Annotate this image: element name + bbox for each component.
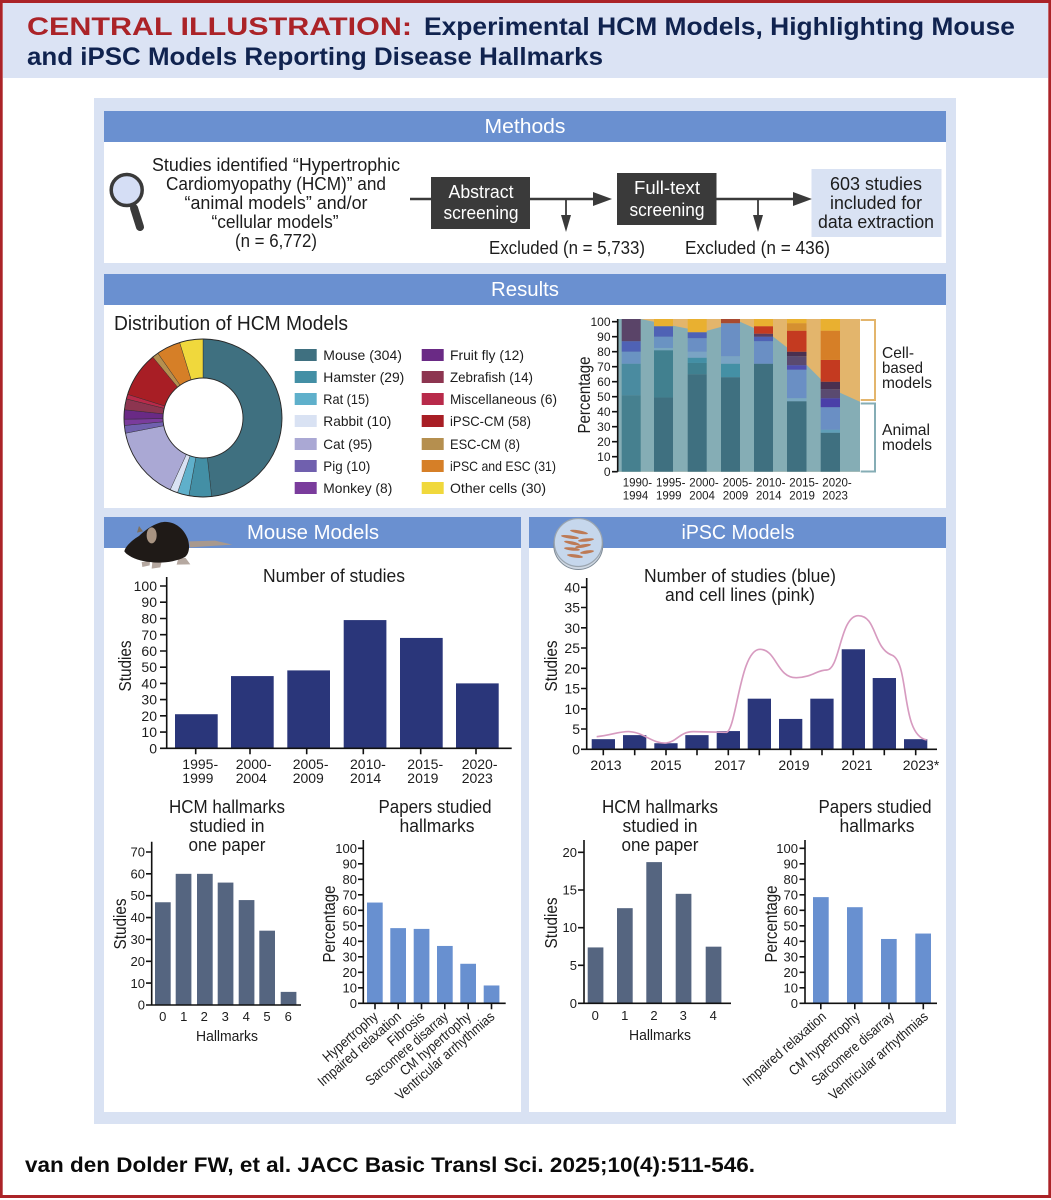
chart: iPSC hallmarks per paper: 20	[563, 845, 577, 860]
box: included studies	[812, 169, 942, 237]
bracket: animal models: Animal	[882, 422, 930, 439]
stacked area chart: percentage by period: 90	[597, 330, 611, 344]
results heading: Results	[491, 278, 559, 301]
chart: mouse hallmarks per paper: Studies	[110, 898, 130, 950]
chart: mouse papers studied hallmarks: Impaired relaxation	[314, 1008, 404, 1089]
chart: mouse hallmarks per paper: 50	[131, 888, 145, 903]
bracket: animal models	[861, 404, 932, 472]
arrow: excluded after full text	[753, 199, 763, 232]
chart: number of mouse studies: 2009	[293, 770, 324, 786]
chart: mouse papers studied hallmarks: 0	[350, 996, 357, 1011]
search description text: (n = 6,772)	[235, 231, 317, 251]
chart: mouse papers studied hallmarks: Papers studied	[378, 797, 492, 817]
donut legend: Other cells (30)	[450, 480, 546, 496]
chart: mouse hallmarks per paper: 4	[243, 1009, 250, 1024]
chart: number of mouse studies: 50	[141, 659, 157, 675]
title banner: and iPSC Models Reporting Disease Hallmarks	[27, 43, 603, 71]
chart: number of mouse studies: Number of studies	[263, 566, 405, 586]
arrow: main flow	[410, 192, 812, 206]
chart: number of mouse studies: 10	[141, 724, 157, 740]
mouse heading: Mouse Models	[247, 521, 379, 544]
chart: iPSC papers studied hallmarks: 0	[791, 996, 798, 1011]
chart: iPSC hallmarks per paper: 0	[592, 1008, 599, 1023]
chart: iPSC hallmarks per paper: studied in	[622, 816, 698, 836]
chart: iPSC studies and cell lines: Number of studies (blue)	[644, 566, 836, 586]
chart: iPSC hallmarks per paper: 0	[570, 996, 577, 1011]
outer light-blue panel background	[94, 98, 956, 1124]
chart: mouse hallmarks per paper: 3	[222, 1009, 229, 1024]
bracket: cell-based models	[861, 320, 932, 400]
donut legend: Rat (15)	[323, 391, 369, 407]
chart: number of mouse studies: 2005-	[293, 756, 329, 772]
chart: iPSC studies and cell lines: 2021	[841, 757, 873, 773]
chart: iPSC papers studied hallmarks: Percentage	[761, 886, 781, 962]
excluded count 5,733: Excluded (n = 5,733)	[489, 238, 645, 258]
arrow: excluded after abstract	[561, 199, 571, 232]
stacked area chart: percentage by period: 70	[597, 360, 611, 374]
chart: iPSC papers studied hallmarks: 20	[784, 965, 798, 980]
stacked area chart: percentage by period: 80	[597, 345, 611, 359]
donut legend: Zebrafish (14)	[450, 369, 533, 385]
chart: mouse hallmarks per paper: 6	[285, 1009, 292, 1024]
donut legend: Rabbit (10)	[323, 413, 391, 429]
chart: iPSC papers studied hallmarks: 80	[784, 872, 798, 887]
chart: mouse papers studied hallmarks: 60	[343, 903, 357, 918]
chart: number of mouse studies: 40	[141, 676, 157, 692]
stacked area chart: percentage by period: 40	[597, 405, 611, 419]
chart: iPSC hallmarks per paper: Studies	[541, 897, 561, 948]
panel: methods	[104, 111, 946, 263]
chart: number of mouse studies: 1999	[182, 770, 214, 786]
chart: iPSC papers studied hallmarks: CM hypertrophy	[785, 1008, 863, 1079]
chart: mouse hallmarks per paper: 70	[131, 844, 145, 860]
chart: iPSC hallmarks per paper	[541, 797, 731, 1044]
bracket: cell-based models: Cell-	[882, 345, 914, 362]
chart: number of mouse studies: Studies	[115, 640, 135, 692]
chart: mouse hallmarks per paper: 1	[180, 1009, 187, 1024]
chart: mouse papers studied hallmarks: 10	[343, 980, 357, 996]
chart: iPSC studies and cell lines: 30	[564, 620, 580, 636]
chart: mouse papers studied hallmarks: 40	[343, 934, 357, 949]
methods heading	[104, 111, 946, 142]
distribution heading: Distribution of HCM Models	[114, 313, 348, 335]
bracket: cell-based models: models	[882, 375, 932, 392]
donut legend: Pig (10)	[323, 458, 370, 474]
stacked area chart: percentage by period: 2009	[723, 490, 748, 502]
stacked area chart: percentage by period: 2020-	[822, 478, 852, 490]
chart: number of mouse studies: 2023	[462, 770, 493, 786]
chart: iPSC hallmarks per paper: 5	[570, 958, 577, 973]
chart: iPSC hallmarks per paper: 1	[621, 1008, 628, 1023]
chart: iPSC studies and cell lines: 2013	[590, 757, 622, 773]
stacked area chart: percentage by period: 2023	[822, 490, 848, 502]
stacked area chart: percentage by period: 20	[597, 435, 611, 449]
chart: iPSC papers studied hallmarks: 40	[784, 934, 798, 949]
chart: number of mouse studies: 60	[141, 643, 157, 659]
chart: iPSC studies and cell lines: 2015	[650, 757, 682, 773]
donut legend: Cat (95)	[323, 436, 372, 452]
box: included studies: data extraction	[818, 212, 934, 232]
stacked area chart: percentage by period: 2000-	[689, 478, 719, 490]
icon: magnifying glass	[111, 174, 142, 227]
iPSC heading	[529, 517, 946, 548]
chart: iPSC studies and cell lines	[541, 566, 940, 773]
chart: number of mouse studies: 2000-	[236, 756, 272, 772]
chart: iPSC studies and cell lines: 20	[564, 660, 580, 676]
chart: iPSC hallmarks per paper: HCM hallmarks	[602, 797, 718, 817]
stacked area chart: percentage by period: 2014	[756, 490, 782, 502]
bracket: cell-based models: based	[882, 360, 923, 377]
chart: mouse papers studied hallmarks: 70	[343, 888, 357, 902]
mouse heading	[104, 517, 521, 548]
chart: iPSC papers studied hallmarks: 50	[784, 918, 798, 934]
stacked area chart: percentage by period: 2004	[689, 490, 715, 502]
box: full-text screening	[617, 173, 716, 225]
chart: iPSC papers studied hallmarks: Impaired relaxation	[739, 1008, 829, 1089]
chart: mouse hallmarks per paper: studied in	[190, 816, 264, 836]
chart: iPSC papers studied hallmarks: 30	[784, 950, 798, 964]
search description text: Studies identified “Hypertrophic	[152, 155, 400, 175]
chart: number of mouse studies: 70	[141, 627, 157, 643]
donut legend: iPSC and ESC (31)	[450, 458, 556, 474]
chart: mouse hallmarks per paper: HCM hallmarks	[169, 797, 285, 817]
chart: iPSC hallmarks per paper: one paper	[622, 835, 698, 855]
panel: results	[104, 274, 946, 508]
box: full-text screening: Full-text	[634, 178, 700, 198]
chart: iPSC studies and cell lines: 5	[572, 721, 580, 737]
donut legend: Hamster (29)	[323, 369, 404, 385]
stacked area chart: percentage by period: 10	[597, 450, 611, 464]
chart: iPSC hallmarks per paper: 4	[710, 1008, 717, 1023]
chart: mouse papers studied hallmarks: 20	[343, 965, 357, 980]
chart: iPSC studies and cell lines: 15	[564, 680, 580, 696]
donut legend: Mouse (304)	[323, 347, 402, 363]
chart: number of mouse studies: 100	[134, 578, 157, 594]
chart: mouse papers studied hallmarks	[314, 797, 506, 1103]
box: abstract screening	[431, 177, 530, 229]
box: abstract screening: screening	[444, 203, 518, 223]
chart: mouse papers studied hallmarks: Ventricular arrhythmias	[392, 1008, 497, 1103]
chart: mouse papers studied hallmarks: 90	[343, 856, 357, 872]
chart: mouse papers studied hallmarks: Hypertrophy	[319, 1008, 381, 1065]
chart: mouse hallmarks per paper	[110, 797, 301, 1045]
chart: iPSC papers studied hallmarks	[739, 797, 937, 1103]
chart: iPSC papers studied hallmarks: 70	[784, 888, 798, 902]
box: full-text screening: screening	[630, 200, 704, 220]
chart: iPSC studies and cell lines: Studies	[541, 640, 561, 692]
chart: iPSC papers studied hallmarks: 60	[784, 903, 798, 918]
stacked area chart: percentage by period: 2019	[789, 490, 815, 502]
chart: mouse hallmarks per paper: one paper	[188, 835, 266, 855]
box: included studies: 603 studies	[830, 174, 922, 194]
methods heading: Methods	[484, 115, 566, 138]
panel: mouse models	[104, 517, 521, 1112]
chart: mouse papers studied hallmarks: 80	[343, 872, 357, 887]
chart: mouse papers studied hallmarks: CM hypertrophy	[396, 1008, 474, 1079]
chart: number of mouse studies: 80	[141, 610, 157, 626]
chart: number of mouse studies: 90	[141, 594, 157, 610]
chart: mouse papers studied hallmarks: Fibrosis	[384, 1008, 427, 1049]
search description text: “animal models” and/or	[184, 193, 368, 213]
chart: number of mouse studies: 2019	[407, 770, 439, 786]
title banner	[3, 3, 1048, 78]
search description text: “cellular models”	[212, 212, 338, 232]
results heading	[104, 274, 946, 305]
stacked area chart: percentage by period: 1990-	[623, 478, 652, 490]
chart: iPSC studies and cell lines: 2019	[778, 757, 810, 773]
chart: iPSC studies and cell lines: 2017	[714, 757, 746, 773]
donut legend	[295, 347, 557, 496]
chart: iPSC hallmarks per paper: Hallmarks	[629, 1027, 691, 1044]
bracket: animal models: models	[882, 437, 932, 454]
chart: mouse hallmarks per paper: 0	[138, 998, 145, 1012]
excluded count 436: Excluded (n = 436)	[685, 238, 830, 258]
chart: iPSC studies and cell lines: 35	[564, 600, 580, 616]
chart: number of mouse studies: 1995-	[182, 756, 218, 772]
chart: mouse hallmarks per paper: 30	[131, 932, 145, 947]
title banner: Experimental HCM Models, Highlighting Mouse	[424, 13, 1015, 41]
chart: iPSC studies and cell lines: 40	[564, 580, 580, 596]
chart: mouse papers studied hallmarks: hallmarks	[400, 816, 474, 836]
stacked area chart: percentage by period: 1999	[656, 490, 682, 502]
chart: iPSC papers studied hallmarks: hallmarks	[840, 816, 914, 836]
chart: iPSC studies and cell lines: 10	[564, 701, 580, 717]
stacked area chart: percentage by period: 2010-	[756, 478, 786, 490]
chart: mouse hallmarks per paper: 2	[201, 1009, 208, 1024]
donut legend: Monkey (8)	[323, 480, 392, 496]
stacked area chart: percentage by period: 60	[597, 375, 611, 389]
chart: number of mouse studies: 2004	[236, 770, 267, 786]
stacked area chart: percentage by period: 1994	[623, 490, 649, 502]
chart: mouse hallmarks per paper: 20	[131, 954, 145, 969]
chart: mouse papers studied hallmarks: Sarcomere disarray	[362, 1008, 451, 1088]
chart: mouse papers studied hallmarks: 50	[343, 918, 357, 934]
stacked area chart: percentage by period: 30	[597, 420, 611, 434]
chart: iPSC papers studied hallmarks: 10	[784, 980, 798, 996]
chart: mouse hallmarks per paper: 5	[263, 1009, 271, 1024]
stacked area chart: percentage by period: 50	[597, 390, 611, 404]
search description text: Cardiomyopathy (HCM)” and	[166, 174, 386, 194]
chart: iPSC hallmarks per paper: 2	[650, 1008, 658, 1023]
citation footer: van den Dolder FW, et al. JACC Basic Transl Sci. 2025;10(4):511-546.	[25, 1154, 755, 1177]
stacked area chart: percentage by period: 2015-	[789, 478, 819, 490]
chart: number of mouse studies	[115, 566, 512, 786]
chart: iPSC hallmarks per paper: 3	[680, 1008, 687, 1023]
stacked area chart: percentage by period	[574, 315, 860, 502]
chart: number of mouse studies: 0	[149, 740, 157, 756]
icon: mouse	[124, 522, 232, 569]
chart: number of mouse studies: 2015-	[407, 756, 443, 772]
iPSC heading: iPSC Models	[682, 521, 794, 544]
chart: iPSC hallmarks per paper: 15	[563, 882, 577, 898]
chart: mouse hallmarks per paper: Hallmarks	[196, 1028, 258, 1045]
stacked area chart: percentage by period: 0	[604, 465, 611, 479]
panel: iPSC models	[529, 517, 946, 1112]
chart: number of mouse studies: 20	[141, 708, 157, 724]
chart: iPSC papers studied hallmarks: Papers studied	[818, 797, 932, 817]
stacked area chart: percentage by period: 1995-	[656, 478, 686, 490]
title banner: CENTRAL ILLUSTRATION:	[27, 13, 412, 41]
chart: mouse papers studied hallmarks: Percentage	[319, 886, 339, 962]
chart: iPSC studies and cell lines: 25	[564, 640, 580, 656]
search description text	[152, 155, 400, 251]
stacked area chart: percentage by period: 2005-	[723, 478, 752, 490]
chart: iPSC studies and cell lines: and cell lines (pink)	[665, 585, 815, 605]
chart: iPSC papers studied hallmarks: 100	[776, 841, 798, 856]
chart: mouse papers studied hallmarks: 100	[335, 841, 357, 856]
chart: iPSC studies and cell lines: 2023*	[903, 757, 940, 773]
chart: iPSC papers studied hallmarks: Sarcomere disarray	[808, 1008, 897, 1088]
chart: iPSC papers studied hallmarks: Ventricular arrhythmias	[825, 1008, 931, 1103]
donut legend: Fruit fly (12)	[450, 347, 524, 363]
chart: iPSC papers studied hallmarks: 90	[784, 856, 798, 872]
chart: number of mouse studies: 2010-	[350, 756, 386, 772]
chart: number of mouse studies: 2014	[350, 770, 381, 786]
box: abstract screening: Abstract	[448, 182, 514, 202]
chart: iPSC studies and cell lines: 0	[572, 742, 580, 758]
chart: mouse hallmarks per paper: 10	[131, 976, 145, 991]
donut legend: Miscellaneous (6)	[450, 391, 557, 407]
chart: number of mouse studies: 30	[141, 692, 157, 708]
chart: mouse hallmarks per paper: 40	[131, 910, 145, 925]
chart: mouse hallmarks per paper: 0	[159, 1009, 166, 1024]
chart: mouse hallmarks per paper: 60	[131, 866, 145, 882]
icon: petri dish with cells	[554, 518, 603, 570]
box: included studies: included for	[830, 193, 922, 213]
chart: iPSC hallmarks per paper: 10	[563, 920, 577, 935]
donut legend: ESC-CM (8)	[450, 436, 520, 452]
donut legend: iPSC-CM (58)	[450, 413, 531, 429]
stacked area chart: percentage by period: 100	[590, 315, 611, 329]
chart: mouse papers studied hallmarks: 30	[343, 950, 357, 964]
chart: number of mouse studies: 2020-	[462, 756, 498, 772]
stacked area chart: percentage by period: Percentage	[574, 356, 594, 434]
donut chart	[124, 339, 282, 497]
